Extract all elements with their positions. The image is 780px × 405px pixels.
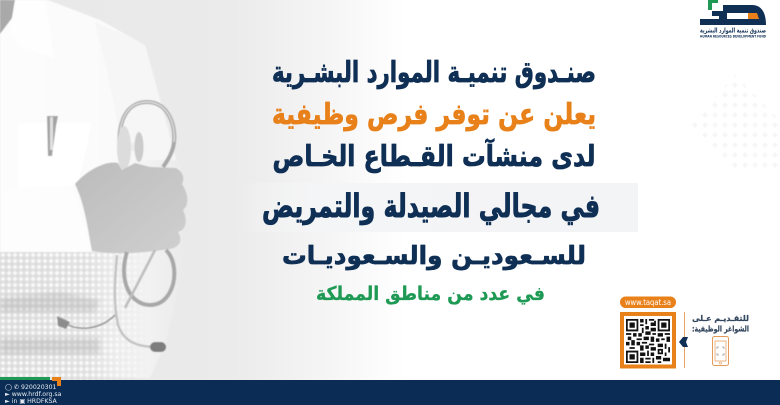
orange accent xyxy=(52,377,61,386)
line 1: صنـدوق تنميـة الموارد البشـرية xyxy=(272,55,596,89)
pen xyxy=(47,116,58,156)
logo mark xyxy=(700,0,766,25)
collar xyxy=(10,0,54,58)
neck shadow xyxy=(0,0,15,34)
line 5: للسـعوديـن والسـعوديـات xyxy=(282,241,586,271)
contact text: ► in ▣ HRDFKSA xyxy=(5,398,58,405)
doctor photo xyxy=(0,0,187,380)
contact text: ◯ ✆ 920020301 xyxy=(5,384,57,391)
headline text xyxy=(262,55,600,305)
highlighted band xyxy=(233,183,638,232)
url pill: www.taqat.sa xyxy=(625,298,671,307)
apply text xyxy=(692,314,749,334)
qr code xyxy=(620,312,676,368)
contact text xyxy=(5,384,62,405)
call to action xyxy=(620,296,749,368)
line 6: في عدد من مناطق المملكة xyxy=(316,283,545,305)
green accent xyxy=(0,377,50,380)
gloved hand xyxy=(75,163,187,253)
dot pattern on lower coat xyxy=(0,252,128,380)
footer bar xyxy=(0,380,780,405)
pocket xyxy=(18,123,92,188)
divider xyxy=(684,312,685,368)
arrow xyxy=(679,337,688,347)
icon: phone xyxy=(712,336,728,366)
cuff xyxy=(0,185,92,262)
faint dot pattern xyxy=(690,75,780,170)
stethoscope cable xyxy=(62,315,115,328)
footer xyxy=(0,377,780,405)
apply text: الشواغر الوظيفية: xyxy=(692,324,749,334)
line 4: في مجالي الصيدلة والتمريض xyxy=(262,187,600,225)
contact text: ► www.hrdf.org.sa xyxy=(5,391,62,398)
stethoscope upper loop xyxy=(119,102,174,167)
stethoscope lower loop xyxy=(124,250,174,305)
coat folds xyxy=(0,292,100,354)
apply text: للتقـديـم عـلى xyxy=(692,314,749,323)
coat xyxy=(0,0,184,378)
logo xyxy=(700,0,766,38)
line 2: يعلن عن توفر فرص وظيفية xyxy=(272,97,596,131)
chest piece xyxy=(117,126,144,170)
ear tips xyxy=(57,316,70,329)
line 3: لدى منشآت القـطاع الخـاص xyxy=(272,138,596,173)
